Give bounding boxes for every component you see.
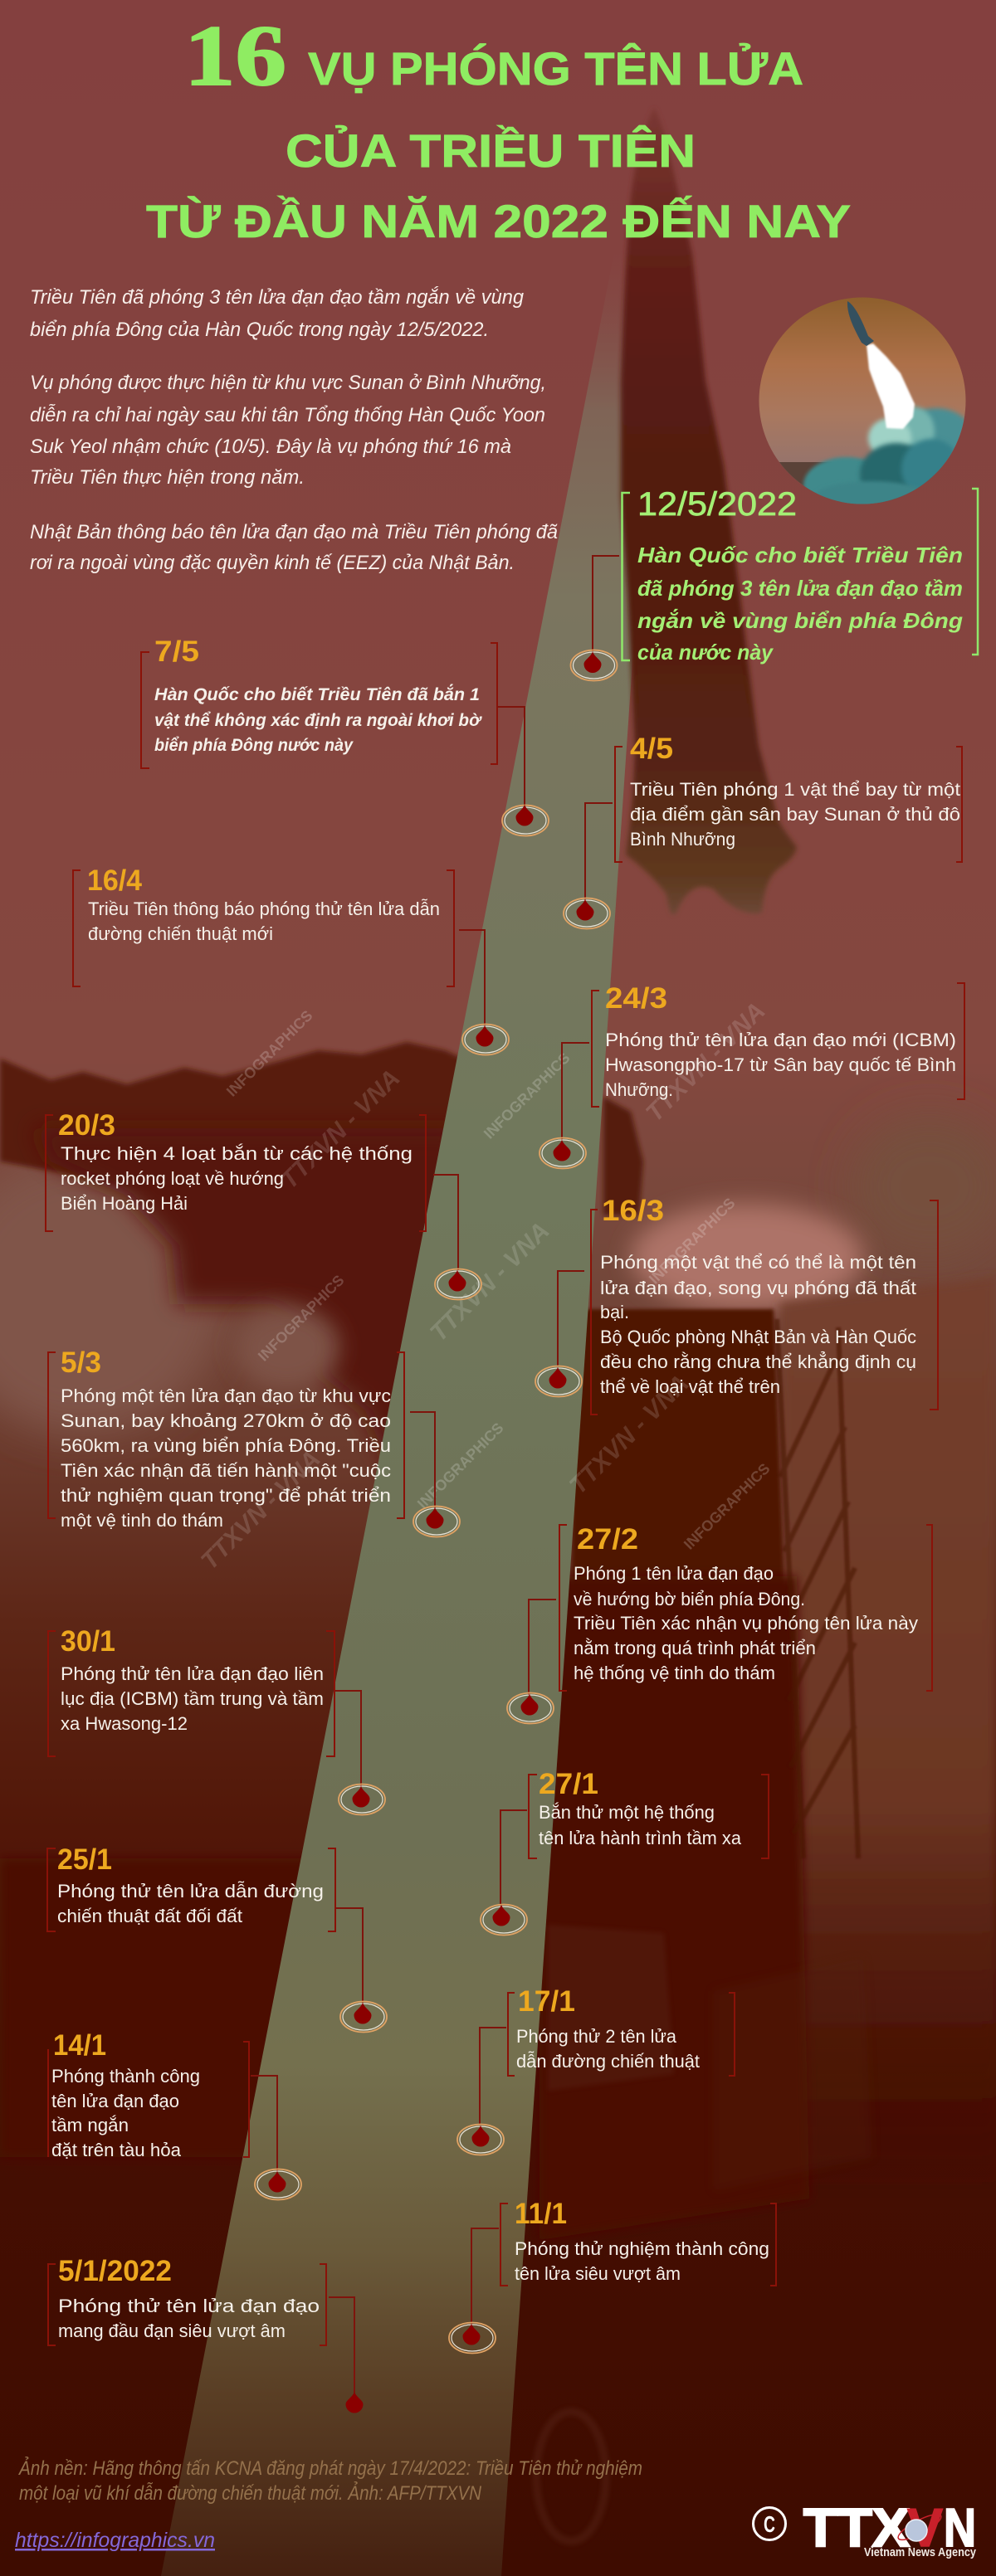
event: 7/5: Hàn Quốc cho biết Triều Tiên đã bắn 1 xyxy=(154,685,480,704)
event: 4/5: Triều Tiên phóng 1 vật thể bay từ một xyxy=(630,779,960,800)
event: 16/3: Phóng một vật thể có thể là một tên xyxy=(600,1252,916,1273)
logo: TTXVN xyxy=(754,2497,977,2559)
watermarks: TTXVN - VNA xyxy=(425,1217,555,1347)
event: 12/5/2022 xyxy=(571,486,978,680)
event: 20/3: Thực hiện 4 loạt bắn từ các hệ thống xyxy=(61,1143,413,1164)
event: 12/5/2022: đã phóng 3 tên lửa đạn đạo tầm xyxy=(637,576,963,601)
event: 11/1: Phóng thử nghiệm thành công xyxy=(515,2238,769,2259)
event: 27/2: Phóng 1 tên lửa đạn đạo xyxy=(574,1563,774,1584)
event: 27/1 xyxy=(481,1768,769,1935)
event: 5/1/2022: mang đầu đạn siêu vượt âm xyxy=(58,2320,286,2341)
light beam xyxy=(161,0,686,2576)
logo: TTXVN: Vietnam News Agency xyxy=(864,2545,977,2559)
event: 30/1 xyxy=(48,1625,385,1815)
event: 14/1: tầm ngắn xyxy=(51,2115,129,2135)
event: 27/2 xyxy=(507,1523,932,1724)
intro text xyxy=(30,286,558,574)
watermarks: TTXVN - VNA xyxy=(641,997,771,1127)
title: CỦA TRIỀU TIÊN xyxy=(286,124,696,177)
event: 12/5/2022: ngắn về vùng biển phía Đông xyxy=(637,608,963,633)
watermarks: INFOGRAPHICS xyxy=(481,1049,574,1142)
event: 20/3 xyxy=(46,1109,481,1299)
event: 7/5: vật thể không xác định ra ngoài khơi bờ xyxy=(154,711,482,730)
event: 16/3: lửa đạn đạo, song vụ phóng đã thất xyxy=(600,1278,916,1298)
photo: missile launch circle xyxy=(759,297,974,514)
intro text: Vụ phóng được thực hiện từ khu vực Sunan ở Bình Nhưỡng, xyxy=(30,372,546,394)
logo: TTXVN: TTX xyxy=(803,2497,910,2558)
event: 24/3 xyxy=(540,982,964,1168)
event: 20/3: rocket phóng loạt về hướng xyxy=(61,1168,284,1189)
watermarks: INFOGRAPHICS xyxy=(414,1419,507,1512)
event: 17/1: dẫn đường chiến thuật xyxy=(516,2051,700,2072)
event: 16/3 xyxy=(535,1195,938,1415)
title: TỪ ĐẦU NĂM 2022 ĐẾN NAY xyxy=(146,195,851,247)
event: 14/1 xyxy=(48,2029,301,2200)
event: 4/5: Bình Nhưỡng xyxy=(630,829,735,850)
event: 20/3: 20/3 xyxy=(58,1109,115,1142)
event: 27/2: 27/2 xyxy=(577,1523,638,1556)
event: 7/5: 7/5 xyxy=(154,635,199,668)
watermarks: INFOGRAPHICS xyxy=(255,1272,348,1365)
event: 17/1 xyxy=(457,1985,735,2155)
event: 27/2: Triều Tiên xác nhận vụ phóng tên lửa này xyxy=(574,1613,918,1634)
event: 5/3: một vệ tinh do thám xyxy=(61,1510,223,1531)
intro text: diễn ra chỉ hai ngày sau khi tân Tổng thống Hàn Quốc Yoon xyxy=(30,403,545,426)
event: 16/3: Bộ Quốc phòng Nhật Bản và Hàn Quốc xyxy=(600,1327,916,1347)
photo caption: một loại vũ khí dẫn đường chiến thuật mới. Ảnh: AFP/TTXVN xyxy=(19,2481,482,2505)
event: 14/1: Phóng thành công xyxy=(51,2066,200,2087)
intro text: Nhật Bản thông báo tên lửa đạn đạo mà Triều Tiên phóng đã xyxy=(30,521,558,543)
event: 5/1/2022 xyxy=(48,2255,364,2413)
event: 5/1/2022: Phóng thử tên lửa đạn đạo xyxy=(58,2296,320,2316)
event: 5/3: 5/3 xyxy=(61,1346,101,1379)
event: 12/5/2022: 12/5/2022 xyxy=(637,486,797,523)
title xyxy=(146,8,851,247)
event: 14/1: tên lửa đạn đạo xyxy=(51,2091,179,2111)
event: 5/3 xyxy=(48,1346,460,1536)
event: 17/1: Phóng thử 2 tên lửa xyxy=(516,2026,677,2047)
event: 27/1: 27/1 xyxy=(539,1768,598,1800)
intro text: Triều Tiên thực hiện trong năm. xyxy=(30,466,305,489)
event: 24/3: Hwasongpho-17 từ Sân bay quốc tế Bình xyxy=(605,1054,956,1075)
intro text: Triều Tiên đã phóng 3 tên lửa đạn đạo tầm ngắn về vùng xyxy=(30,286,525,309)
event: 14/1: 14/1 xyxy=(53,2029,106,2062)
event: 25/1: 25/1 xyxy=(57,1843,112,1876)
event: 25/1: chiến thuật đất đối đất xyxy=(57,1906,242,1926)
missile silhouette xyxy=(621,108,797,914)
event: 11/1: 11/1 xyxy=(515,2198,567,2230)
event: 27/1: tên lửa hành trình tầm xa xyxy=(539,1828,742,1848)
event: 16/4 xyxy=(73,864,509,1055)
event: 12/5/2022: Hàn Quốc cho biết Triều Tiên xyxy=(637,543,963,567)
event: 27/1: Bắn thử một hệ thống xyxy=(539,1802,715,1823)
event: 24/3: Nhưỡng. xyxy=(605,1079,673,1100)
intro text: rơi ra ngoài vùng đặc quyền kinh tế (EEZ) của Nhật Bản. xyxy=(30,552,515,574)
watermarks: INFOGRAPHICS xyxy=(646,1195,739,1288)
event: 16/3: 16/3 xyxy=(602,1195,664,1227)
event: 16/3: đều cho rằng chưa thể khẳng định cụ xyxy=(600,1351,916,1372)
event: 7/5: biển phía Đông nước này xyxy=(154,736,354,755)
event: 17/1: 17/1 xyxy=(518,1985,575,2018)
title: VỤ PHÓNG TÊN LỬA xyxy=(308,42,803,95)
event: 4/5 xyxy=(564,733,962,929)
event: 20/3: Biển Hoàng Hải xyxy=(61,1193,188,1214)
event: 5/3: thử nghiệm quan trọng" để phát triển xyxy=(61,1485,391,1506)
event: 16/3: bại. xyxy=(600,1302,629,1322)
watermarks: TTXVN - VNA xyxy=(564,1370,695,1500)
event: 5/3: 560km, ra vùng biển phía Đông. Triều xyxy=(61,1435,391,1456)
small rocket xyxy=(847,301,874,346)
intro text: biển phía Đông của Hàn Quốc trong ngày 12/5/2022. xyxy=(30,319,489,341)
event: 16/4: đường chiến thuật mới xyxy=(88,923,273,944)
event: 25/1 xyxy=(47,1843,387,2033)
event: 4/5: địa điểm gần sân bay Sunan ở thủ đô xyxy=(630,804,960,825)
logo: TTXVN: C xyxy=(764,2511,775,2537)
title: 16 xyxy=(184,8,286,104)
watermarks: TTXVN - VNA xyxy=(276,1064,406,1195)
watermarks: TTXVN - VNA xyxy=(196,1445,326,1575)
event: 27/2: về hướng bờ biển phía Đông. xyxy=(574,1589,805,1609)
event: 27/2: hệ thống vệ tinh do thám xyxy=(574,1663,775,1683)
watermarks: INFOGRAPHICS xyxy=(681,1460,774,1553)
photo caption xyxy=(17,2456,642,2505)
event: 5/3: Tiên xác nhận đã tiến hành một "cuộc xyxy=(61,1460,391,1481)
event: 11/1: tên lửa siêu vượt âm xyxy=(515,2263,681,2284)
event: 7/5 xyxy=(141,635,549,836)
photo caption: Ảnh nền: Hãng thông tấn KCNA đăng phát ngày 17/4/2022: Triều Tiên thử nghiệm xyxy=(17,2456,642,2480)
event: 30/1: lục địa (ICBM) tầm trung và tầm xyxy=(61,1688,324,1709)
event: 16/3: thể về loại vật thể trên xyxy=(600,1376,780,1397)
event: 30/1: Phóng thử tên lửa đạn đạo liên xyxy=(61,1663,324,1684)
event: 16/4: 16/4 xyxy=(87,864,143,897)
event: 14/1: đặt trên tàu hỏa xyxy=(51,2140,182,2160)
event: 25/1: Phóng thử tên lửa dẫn đường xyxy=(57,1881,324,1902)
event: 30/1: xa Hwasong-12 xyxy=(61,1713,188,1734)
event: 30/1: 30/1 xyxy=(61,1625,115,1658)
event: 4/5: 4/5 xyxy=(630,733,673,765)
event: 5/1/2022: 5/1/2022 xyxy=(58,2255,172,2287)
event: 12/5/2022: của nước này xyxy=(637,640,774,665)
watermarks: INFOGRAPHICS xyxy=(223,1007,316,1100)
intro text: Suk Yeol nhậm chức (10/5). Đây là vụ phóng thứ 16 mà xyxy=(30,436,511,458)
logo: TTXVN: V xyxy=(907,2497,943,2558)
event: 27/2: nằm trong quá trình phát triển xyxy=(574,1638,816,1658)
event: 16/4: Triều Tiên thông báo phóng thử tên lửa dẫn xyxy=(88,898,440,919)
event: 5/3: Phóng một tên lửa đạn đạo từ khu vực xyxy=(61,1385,391,1406)
logo: TTXVN: N xyxy=(944,2497,976,2558)
website link: https://infographics.vn xyxy=(15,2529,215,2552)
event: 24/3: 24/3 xyxy=(605,982,667,1015)
event: 11/1 xyxy=(449,2198,776,2353)
event: 5/3: Sunan, bay khoảng 270km ở độ cao xyxy=(61,1410,391,1431)
watermarks xyxy=(196,997,774,1575)
event: 24/3: Phóng thử tên lửa đạn đạo mới (ICBM) xyxy=(605,1030,956,1050)
